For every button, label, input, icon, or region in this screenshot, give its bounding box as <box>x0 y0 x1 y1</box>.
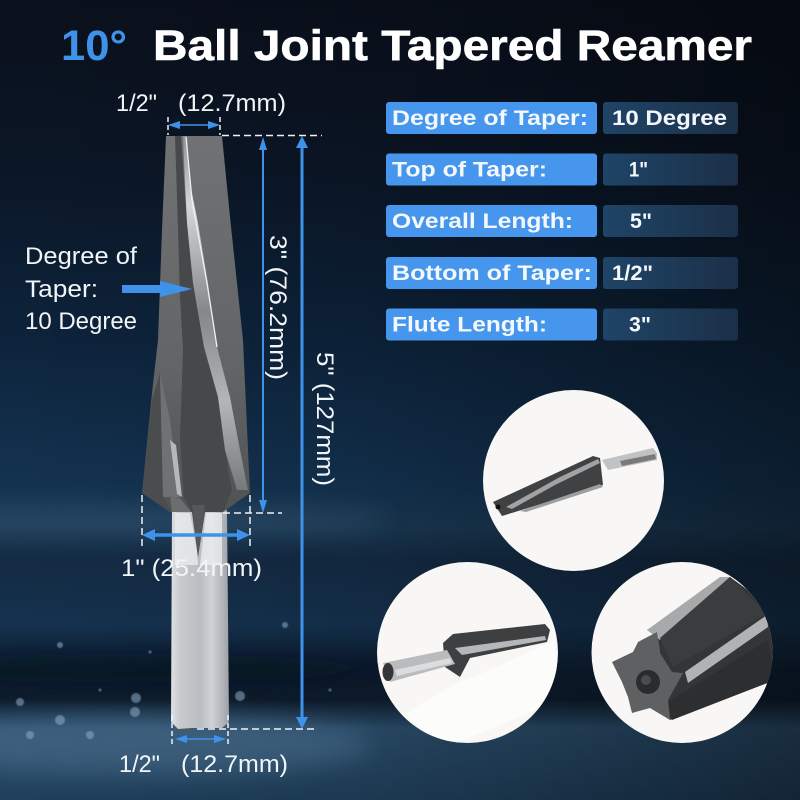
spec: bottom of taper: 1/2" <box>612 262 653 285</box>
dimension: top width 1/2 inch: 1/2" <box>116 90 157 117</box>
spec: bottom of taper: Bottom of Taper: <box>392 262 592 285</box>
dimension: shank 1/2 inch: (12.7mm) <box>181 751 288 778</box>
dimension: taper top 1 inch: 1" (25.4mm) <box>121 555 262 582</box>
callout: degree of taper <box>25 243 192 335</box>
dimension: overall length 5 inch: 5" (127mm) <box>311 352 338 486</box>
tip of flute on the shank <box>192 505 205 557</box>
spec: top of taper <box>386 154 738 186</box>
spec: flute length: 3" <box>629 314 651 336</box>
spec: top of taper: 1" <box>629 158 648 182</box>
spec: flute length: Flute Length: <box>392 314 547 336</box>
title: Ball Joint Tapered Reamer <box>153 22 752 70</box>
detail photo: reamer side view, shank left <box>377 562 560 750</box>
spec: degree of taper: 10 Degree <box>612 107 727 130</box>
main light land <box>183 135 248 490</box>
spec: overall length: 5" <box>630 210 652 233</box>
lower-left land <box>160 374 180 497</box>
reamer fluted body <box>140 130 255 560</box>
dimension: shank 1/2 inch <box>119 715 288 778</box>
detail photo: reamer end view with star flutes <box>592 562 775 743</box>
panel: specification table <box>386 102 738 340</box>
detail photo: reamer side view, tip left <box>483 390 664 571</box>
spec: degree of taper: Degree of Taper: <box>392 107 588 130</box>
title: 10° <box>61 22 127 70</box>
callout: degree of taper: 10 Degree <box>25 308 137 335</box>
spec: degree of taper <box>386 102 738 134</box>
dimension: top width 1/2 inch <box>116 90 286 135</box>
spec: top of taper: Top of Taper: <box>392 158 547 182</box>
dimension: taper top 1 inch <box>121 495 262 582</box>
spec: flute length <box>386 308 738 340</box>
reamer shank <box>171 510 229 731</box>
spec: bottom of taper <box>386 257 738 289</box>
dimension: top width 1/2 inch: (12.7mm) <box>178 90 286 117</box>
dimension: flute length 3 inch <box>222 136 322 513</box>
reamer: main product <box>140 130 255 731</box>
central dark flute <box>175 135 232 557</box>
spec: overall length <box>386 205 738 237</box>
spec: overall length: Overall Length: <box>392 210 573 233</box>
arrow: degree of taper <box>122 281 192 297</box>
callout: degree of taper: Taper: <box>25 276 98 303</box>
dimension: overall length 5 inch <box>197 136 338 729</box>
dimension: shank 1/2 inch: 1/2" <box>119 751 160 778</box>
dimension: flute length 3 inch: 3" (76.2mm) <box>264 235 291 380</box>
callout: degree of taper: Degree of <box>25 243 137 270</box>
